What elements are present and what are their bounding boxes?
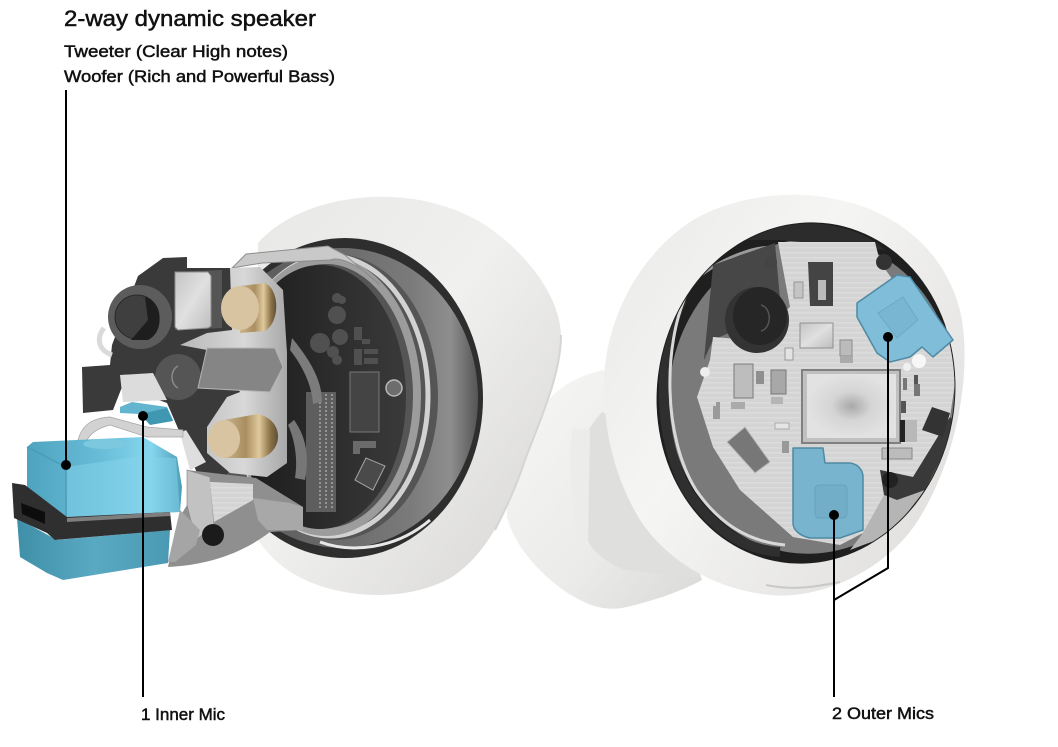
heading: speaker title and details: Tweeter (Clear High notes) bbox=[64, 42, 288, 61]
label: inner mic: 1 Inner Mic bbox=[141, 705, 225, 724]
right earbud cavity bbox=[656, 222, 956, 564]
curved silver tray bottom bbox=[168, 470, 303, 567]
right earbud white shell bbox=[604, 195, 965, 596]
lower blue outer mic bbox=[793, 448, 863, 538]
dark housing behind driver bbox=[82, 257, 240, 480]
callout line: speaker bbox=[61, 90, 71, 470]
speaker black band bbox=[12, 483, 172, 540]
speaker driver knob bbox=[108, 285, 172, 349]
upper blue outer mic bbox=[857, 275, 953, 362]
left earbud dark circuit board bbox=[234, 265, 406, 529]
heading: speaker title and details bbox=[64, 6, 335, 86]
callout line: inner mic bbox=[138, 411, 148, 697]
left earbud silver plate bbox=[180, 267, 287, 477]
right dark frame bbox=[704, 243, 781, 360]
heading: speaker title and details: Woofer (Rich and Powerful Bass) bbox=[64, 67, 335, 86]
inner mic blue block bbox=[120, 402, 173, 425]
dark frame lower right bbox=[880, 417, 958, 500]
brass pin lower bbox=[208, 414, 278, 458]
label: outer mics: 2 Outer Mics bbox=[832, 704, 934, 723]
left earbud cavity and rim bbox=[206, 238, 483, 558]
silver patch lower right bbox=[850, 490, 925, 550]
heading: speaker title and details: 2-way dynamic speaker bbox=[64, 6, 316, 31]
left earbud top metal bracket bbox=[232, 246, 380, 285]
callout lines: outer mics bbox=[829, 332, 893, 697]
right brushed circuit plate bbox=[697, 242, 958, 545]
right earbud black round part bbox=[725, 287, 789, 353]
brass pin upper bbox=[221, 283, 276, 333]
round dark part centre bbox=[155, 354, 201, 400]
left earbud white shell bbox=[258, 197, 561, 595]
speaker blue housing upper bbox=[27, 437, 182, 517]
silver block top bbox=[175, 270, 222, 330]
right board components bbox=[700, 262, 950, 473]
eartip between the two buds bbox=[507, 370, 702, 609]
speaker blue housing lower bbox=[17, 518, 170, 580]
bracket above speaker bbox=[78, 417, 183, 442]
silver strip under driver bbox=[120, 373, 167, 402]
grey centre block bbox=[198, 348, 283, 392]
